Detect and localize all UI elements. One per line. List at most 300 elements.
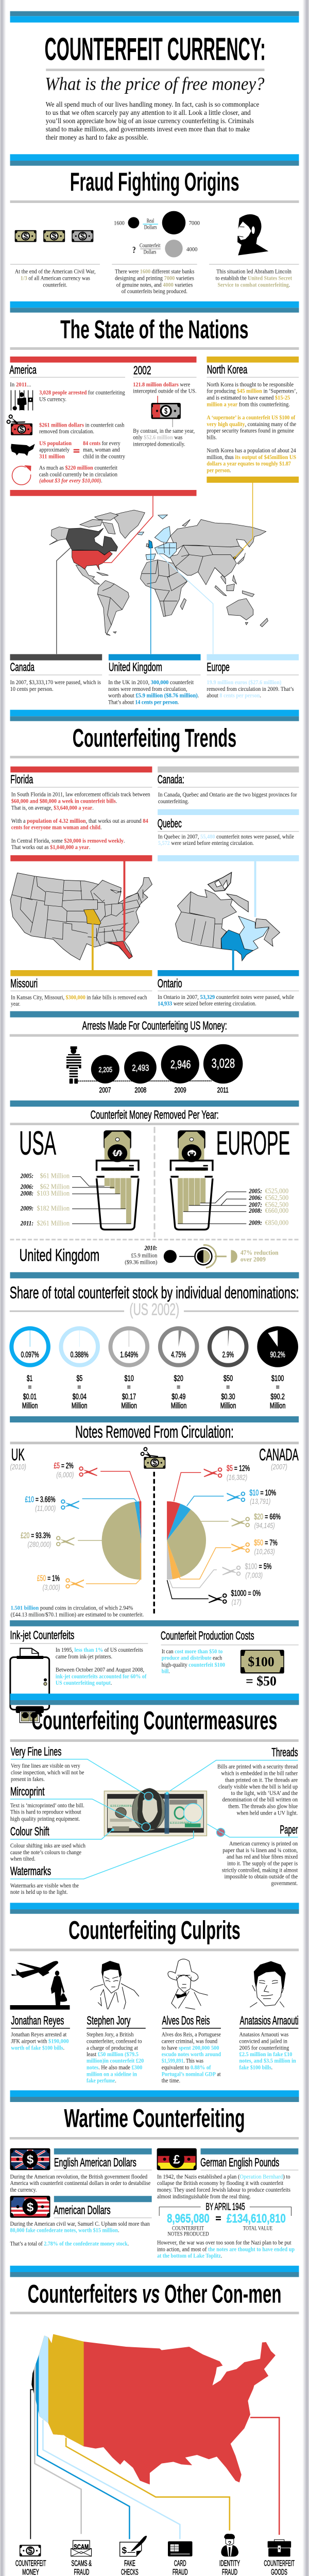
panel: Jonathan Reyes: worth of fake $100 bills . xyxy=(11,2044,64,2051)
callout: Very Fine Lines: Very Fine Lines xyxy=(11,1744,62,1758)
panel: English American Dollars xyxy=(10,2148,152,2193)
chart: real and counterfeit dollars circles: Counterfeit xyxy=(140,242,161,249)
icon: scissors cutting bill xyxy=(7,414,32,435)
stat: identity fraud: ? xyxy=(228,2540,231,2548)
dashed centre line xyxy=(153,1472,155,1616)
icon: portrait Alves Dos Reis xyxy=(168,1959,208,2009)
panel: Canada xyxy=(10,654,102,692)
panel: Ontario: In Ontario in 2007, 53,329 counterfeit notes were passed, while xyxy=(158,993,294,1001)
red bar above world map xyxy=(10,490,197,496)
series labels Europe: 2008: xyxy=(248,1207,262,1215)
series labels UK: (280,000) xyxy=(28,1541,52,1549)
section bar: origins xyxy=(10,154,299,166)
equals sign xyxy=(74,449,79,453)
chart: $10 share: 1.649% xyxy=(120,1350,138,1359)
panel: Anatasios Arnaouti xyxy=(239,1961,299,2071)
chart: $20 share xyxy=(160,1328,197,1410)
series labels Canada: $5 = 12% xyxy=(227,1463,250,1473)
icon: US flag bill: $ xyxy=(27,2200,33,2214)
panel: German English Pounds xyxy=(157,2148,298,2259)
callout: Very Fine Lines xyxy=(11,1744,84,1783)
series labels USA: $62 Million xyxy=(40,1183,70,1191)
text: state banks: There were 1600 different state banks xyxy=(115,268,195,275)
chart: $20 share: = xyxy=(177,1383,180,1392)
panel: Alves Dos Reis: the time. xyxy=(162,2077,180,2084)
series labels USA: 2008: xyxy=(20,1190,33,1198)
panel: Ink-jet Counterfeits: Between October 2007 and August 2008, xyxy=(56,1666,144,1673)
teal bar: arrests xyxy=(10,1011,299,1018)
chart: $50 share: 2.9% xyxy=(222,1350,234,1359)
series labels UK: (6,000) xyxy=(56,1471,74,1479)
chart: $10 share xyxy=(110,1328,147,1410)
chart: $5 share: $0.04 xyxy=(73,1392,87,1401)
series labels UK: £10 = 3.66% xyxy=(25,1495,56,1504)
chart: arrests ball and chain: 2,493 xyxy=(132,1063,149,1073)
chart: half-circle reduction xyxy=(164,1245,237,1268)
panel: Stephen Jory xyxy=(87,1961,146,2084)
panel: Europe: removed from circulation in 2009. That’s xyxy=(207,685,294,692)
label: EUROPE: EUROPE xyxy=(216,1125,290,1162)
pie: UK xyxy=(102,1501,141,1580)
callout: Threads: Bills are printed with a security thread xyxy=(217,1763,298,1770)
panel: Alves Dos Reis: to have spent 200,000 500 xyxy=(162,2044,219,2051)
header bar xyxy=(10,11,299,23)
heading rule xyxy=(10,200,299,203)
panel: Quebec: Quebec xyxy=(158,817,182,830)
panel: English American Dollars: America with counterfeit continental dollars in order to destabilise xyxy=(10,2179,150,2187)
panel: Canada provinces: counterfeiting. xyxy=(158,798,189,805)
heading: money removed per year: Counterfeit Money Removed Per Year: xyxy=(91,1108,219,1122)
intro text: their money as hard to fake as possible. xyxy=(46,134,148,142)
panel: Canada notes: (2007) xyxy=(271,1463,287,1471)
text: state banks xyxy=(115,268,195,295)
series labels Europe: 2007: xyxy=(248,1201,262,1209)
intro text xyxy=(46,101,260,142)
panel: Stephen Jory: least £50 million ($79.5 xyxy=(87,2050,139,2058)
panel: German English Pounds: collapse the British economy by flooding it with counterfeit xyxy=(157,2179,284,2187)
panel: Florida xyxy=(10,767,152,851)
heading: denominations: Share of total counterfeit stock by individual denominations: xyxy=(10,1284,299,1302)
callout: Threads: to the light, with ‘USA’ and the xyxy=(231,1789,298,1797)
panel: North Korea: A ‘supernote’ is a counterfeit US $100 of xyxy=(207,414,295,421)
heading: Wartime Counterfeiting: Wartime Counterfeiting xyxy=(64,2105,245,2133)
chart: arrests ball and chain: 2009 xyxy=(175,1087,186,1095)
heading: Counterfeiting Countermeasures: Counterfeiting Countermeasures xyxy=(31,1707,277,1736)
heading rule xyxy=(10,1034,299,1037)
stat: fake checks: $ xyxy=(122,2545,127,2555)
series labels Europe: €562,500 xyxy=(265,1194,288,1202)
panel: UK notes: (£44.13 million/$70.1 million) are estimated to be counterfeit. xyxy=(11,1611,144,1618)
icon: USA silhouette xyxy=(11,444,35,456)
series labels Canada xyxy=(204,1463,281,1606)
panel: Florida: In Central Florida, some $20,000 is removed weekly . xyxy=(11,837,125,844)
panel: Jonathan Reyes xyxy=(10,1961,70,2051)
panel: United Kingdom: That’s about 14 cents per person . xyxy=(108,699,179,705)
callout: Threads: clearly visible when the bill is held up xyxy=(218,1783,298,1790)
callout: Paper: paper that is ¼ linen and ¾ cotton, xyxy=(222,1846,298,1854)
chart: $10 share: Million xyxy=(121,1401,137,1410)
panel: North Korea: per person . xyxy=(207,467,231,473)
heading rule xyxy=(10,2137,299,2140)
map: USA share by fraud type xyxy=(30,2334,280,2539)
series labels USA: $261 Million xyxy=(37,1220,70,1228)
chart: arrests ball and chain: 2,205 xyxy=(98,1066,112,1074)
subheading: US 2002 xyxy=(10,1301,299,1319)
panel: Alves Dos Reis: $1,599,891 . This was xyxy=(162,2057,204,2064)
text: state banks: of genuine notes, and 4000 varieties xyxy=(116,281,193,288)
panel: UK notes: (2010) xyxy=(10,1463,26,1471)
callout: Paper xyxy=(222,1823,298,1887)
series labels Canada: (10,263) xyxy=(254,1548,275,1556)
panel: America: child in the country xyxy=(83,453,126,460)
panel: Alves Dos Reis: equivalent to 0.88% of xyxy=(162,2064,211,2071)
callout: Very Fine Lines: Very fine lines are visible on very xyxy=(11,1762,80,1769)
intro text: We all spend much of our lives handling money. In fact, cash is so commonplace xyxy=(46,101,260,109)
icon: German flag bill xyxy=(157,2148,197,2170)
chart: $1 share: = xyxy=(28,1383,31,1392)
icon: three bills: $ xyxy=(23,232,28,241)
panel: North Korea: very high quality , containing many of the xyxy=(207,420,296,428)
series labels USA: $182 Million xyxy=(37,1205,70,1213)
panel: Jonathan Reyes: JFK airport with $190,000 xyxy=(11,2038,69,2044)
callout: Threads: them. The threads also glow blue xyxy=(228,1803,298,1809)
callout: Mircoprint: Mircoprint xyxy=(10,1785,45,1798)
stat: counterfeit money xyxy=(10,2545,54,2576)
panel: Alves Dos Reis: Alves Dos Reis xyxy=(162,2013,210,2027)
callout lines xyxy=(10,1759,298,1879)
callout: Colour Shift xyxy=(10,1824,86,1862)
panel: North Korea: for producing $45 million in ‘Supernotes’, xyxy=(207,387,297,394)
callout: Watermarks: Watermarks xyxy=(10,1864,51,1878)
icon: scissors and bill centre xyxy=(140,1447,165,1469)
panel: North Korea: and is estimated to have earned $15-25 xyxy=(207,394,290,401)
panel: Alves Dos Reis: escudo notes worth around xyxy=(162,2050,221,2058)
icon: portrait Stephen Jory xyxy=(90,1961,139,2009)
panel: United Kingdom: worth about £5.9 million ($8.76 million) . xyxy=(108,692,199,699)
teal bar: ink-jet xyxy=(10,1620,299,1626)
text: civil war: 1/3 of all American currency was xyxy=(21,275,91,281)
icon: payment card xyxy=(168,2541,192,2556)
panel: Quebec: In Quebec in 2007, 55,480 counterfeit notes were passed, while xyxy=(158,833,294,840)
panel: America: removed from circulation. xyxy=(39,428,94,435)
panel: Counterfeit Production Costs: produce and distribute each xyxy=(162,1654,222,1661)
panel: America: $261 million dollars in counterfeit cash xyxy=(39,421,125,428)
section bar: con-men xyxy=(10,2266,299,2277)
series labels Europe: €562,500 xyxy=(265,1201,288,1209)
callout: Colour Shift: Colour Shift xyxy=(10,1824,49,1838)
series labels Canada: (94,145) xyxy=(254,1522,275,1530)
panel: America: America xyxy=(9,363,37,377)
rules over columns xyxy=(10,264,299,265)
series labels Europe xyxy=(178,1188,288,1227)
illustration: $100 banknote: E31119560FE xyxy=(170,1822,193,1824)
panel: UK notes: 1.501 billion pound coins in circulation, of which 2.94% xyxy=(11,1604,133,1611)
stat: scams and fraud xyxy=(60,2540,101,2576)
panel: Anatasios Arnaouti: fake $100 bills . xyxy=(239,2064,272,2071)
series labels Europe: €660,000 xyxy=(265,1207,288,1215)
series labels USA: 2005: xyxy=(20,1173,33,1180)
callout: Very Fine Lines: close inspection, which will not be xyxy=(11,1769,84,1776)
stat: card fraud xyxy=(160,2541,198,2576)
chart: $1 share xyxy=(11,1328,48,1410)
callout: Watermarks: note is held up to the light. xyxy=(10,1888,68,1895)
illustration: $100 banknote xyxy=(104,1788,225,1837)
series labels USA: 2006: xyxy=(20,1183,33,1191)
chart: $5 share: Million xyxy=(72,1401,88,1410)
series labels Canada: (7,003) xyxy=(245,1572,263,1580)
icon: prisoner xyxy=(66,1046,81,1083)
chart: USA shredder xyxy=(20,1130,142,1230)
chart: $5 share xyxy=(61,1328,98,1410)
panel: Ontario xyxy=(158,970,299,1007)
panel: Anatasios Arnaouti: Anatasios Arnaouti xyxy=(240,2013,299,2027)
panel: Quebec xyxy=(158,809,299,846)
panel: America: (about $3 for every $10,000) . xyxy=(39,477,102,484)
intro text: stand to make millions, and governments invest even more than that to make xyxy=(46,126,250,133)
panel: American Dollars: 80,000 fake confederate notes, worth $15 million . xyxy=(10,2227,119,2233)
panel: Ink-jet Counterfeits: US counterfeiting output . xyxy=(56,1679,112,1686)
icon: scissors and bill centre: $ xyxy=(152,1459,157,1468)
panel: Stephen Jory: fake perfume . xyxy=(87,2077,116,2084)
text: secret service: This situation led Abraham Lincoln xyxy=(216,268,292,275)
chart: real and counterfeit dollars circles: ? xyxy=(132,245,136,255)
heading: arrests: Arrests Made For Counterfeiting US Money: xyxy=(82,1019,227,1032)
panel: Florida: That is, on average, $3,640,000 a year . xyxy=(11,804,94,811)
icon: $100 bill xyxy=(241,1650,284,1673)
panel: Stephen Jory: Stephen Jory xyxy=(87,2013,131,2027)
panel: Canada provinces: In Canada, Quebec and Ontario are the two biggest provinces for xyxy=(158,791,297,798)
panel: Counterfeit Production Costs: Counterfeit Production Costs xyxy=(161,1629,254,1642)
text: civil war: counterfeit. xyxy=(43,281,67,288)
panel: Florida: cents for everyone man woman and child . xyxy=(11,824,101,831)
panel: Canada notes xyxy=(167,1446,299,1606)
panel: German English Pounds: into action, and most of the notes are thought to have ended up xyxy=(157,2246,295,2252)
panel: North Korea: North Korea is thought to be responsible xyxy=(207,381,294,388)
chart: $20 share: $0.49 xyxy=(171,1392,186,1401)
series labels Canada: $20 = 66% xyxy=(254,1512,281,1521)
chart: $50 share xyxy=(210,1328,247,1410)
series labels Europe: €850,000 xyxy=(265,1219,288,1227)
callout: Mircoprint xyxy=(10,1785,84,1822)
chart: $5 share: = xyxy=(77,1383,81,1392)
callout: Watermarks xyxy=(10,1864,79,1895)
panel: North Korea: North Korea xyxy=(207,363,247,376)
series labels Canada: (17) xyxy=(232,1598,242,1606)
panel: Alves Dos Reis: Alves dos Reis, a Portuguese xyxy=(162,2031,221,2038)
chart: $20 share: 4.75% xyxy=(171,1350,186,1359)
section bar: nations xyxy=(10,301,299,313)
map: Canada provinces xyxy=(176,861,280,970)
panel: Florida: $60,000 and $80,000 a week in counterfeit bills . xyxy=(11,798,117,804)
stat: counterfeit money: $ xyxy=(28,2547,32,2555)
icon: briefcase xyxy=(268,2539,291,2556)
panel: Ontario: 14,933 were seized before entering circulation. xyxy=(158,1000,256,1007)
series labels Europe: €525,000 xyxy=(265,1188,288,1195)
panel: Canada provinces xyxy=(158,767,299,805)
panel: America: US population xyxy=(39,439,72,447)
panel: Anatasios Arnaouti: Anatasios Arnaouti was xyxy=(239,2031,289,2038)
callout: Mircoprint: high quality printing equipment. xyxy=(10,1815,80,1822)
chart: real and counterfeit dollars circles xyxy=(114,211,200,257)
chart: arrests ball and chain xyxy=(66,1044,243,1095)
panel: Alves Dos Reis: Portugal’s nominal GDP at xyxy=(162,2071,221,2077)
heading rule xyxy=(10,1948,299,1951)
chart: real and counterfeit dollars circles: Dollars xyxy=(144,248,157,255)
panel: 2002: 121.8 million dollars were xyxy=(133,381,190,388)
panel: 2002 xyxy=(133,364,197,447)
chart: real and counterfeit dollars circles: Dollars xyxy=(144,224,157,230)
panel: America: As much as $220 million counterfeit xyxy=(39,464,118,471)
panel: America: 311 million xyxy=(39,453,65,460)
panel: United Kingdom: United Kingdom xyxy=(109,660,162,674)
panel: UK notes xyxy=(10,1446,144,1618)
panel: Anatasios Arnaouti: notes, and $3.5 million in xyxy=(239,2057,296,2064)
icon: Union Jack bill xyxy=(10,2148,50,2170)
panel: Ink-jet Counterfeits xyxy=(10,1629,148,1723)
panel: America xyxy=(7,357,197,485)
chart: arrests ball and chain: 2007 xyxy=(99,1087,111,1095)
panel: English American Dollars: During the American revolution, the British government flooded xyxy=(10,2173,148,2180)
teal bar: notes removed xyxy=(10,1416,299,1422)
panel: English American Dollars: English American Dollars xyxy=(54,2156,136,2169)
world map xyxy=(49,483,268,654)
panel: Alves Dos Reis xyxy=(162,1959,221,2084)
series labels Canada: (13,791) xyxy=(250,1498,271,1506)
heading: Counterfeiters vs Other Con-men: Counterfeiters vs Other Con-men xyxy=(28,2280,281,2309)
icon: three bills: $ xyxy=(52,232,57,241)
chart: $50 share: $50 xyxy=(224,1374,233,1383)
chart: $1 share: $0.01 xyxy=(23,1392,37,1401)
panel: German English Pounds: money. They used forced Jewish labour to produce counterfeits xyxy=(157,2186,291,2193)
heading: The State of the Nations: The State of the Nations xyxy=(60,316,249,345)
stat: by April 1945: COUNTERFEIT xyxy=(172,2225,204,2231)
series labels USA: 2011: xyxy=(20,1220,33,1228)
panel: Canada: 10 cents per person. xyxy=(10,685,54,692)
stat: by April 1945: 8,965,080 xyxy=(167,2212,210,2225)
panel: Missouri: Missouri xyxy=(10,977,38,990)
heading: Counterfeiting Culprits: Counterfeiting Culprits xyxy=(68,1917,241,1945)
series labels USA: $103 Million xyxy=(37,1190,70,1198)
series labels UK: £50 = 1% xyxy=(37,1573,60,1583)
panel: American Dollars: American Dollars xyxy=(54,2203,111,2217)
illustration: $100 banknote: E31119560FE xyxy=(110,1805,133,1807)
panel: North Korea: million, thus its output of $45million US xyxy=(207,453,296,461)
callout: Colour Shift: Colour shifting inks are used which xyxy=(10,1842,86,1849)
stat: identity fraud: IDENTITY xyxy=(219,2558,240,2568)
panel: United Kingdom removal: over 2009 xyxy=(241,1257,266,1264)
icon: split bill xyxy=(151,396,181,427)
callout: Threads: denomination of the bill written on xyxy=(222,1796,298,1803)
chart: arrests ball and chain: 2011 xyxy=(217,1087,229,1095)
panel: Quebec: 5,572 were seized before entering circulation. xyxy=(158,839,254,846)
icon: scam envelope xyxy=(71,2540,92,2556)
icon: check and pen xyxy=(120,2536,147,2556)
callout: Mircoprint: Text is ‘microprinted’ onto the bill. xyxy=(10,1802,84,1809)
chart: $100 share: Million xyxy=(270,1401,285,1410)
series labels UK xyxy=(21,1461,97,1592)
heading rule xyxy=(10,1123,299,1125)
intro text: you’ll soon appreciate how big of an issue currency counterfeiting is. Criminals xyxy=(46,117,254,125)
stat: by April 1945: NOTES PRODUCED xyxy=(167,2230,209,2237)
panel: America: US currency. xyxy=(39,396,66,402)
callout: Colour Shift: when tilted. xyxy=(10,1855,36,1862)
panel: United Kingdom removal: £5.9 million xyxy=(131,1252,158,1259)
stat: counterfeit goods: COUNTERFEIT xyxy=(264,2558,295,2568)
panel: America: cash could currently be in circulation xyxy=(39,471,118,478)
map: USA states xyxy=(10,861,152,970)
panel: United Kingdom: In the UK in 2010, 300,000 counterfeit xyxy=(108,679,194,686)
series labels USA: $61 Million xyxy=(40,1173,70,1180)
panel: English American Dollars: the currency. xyxy=(10,2186,37,2193)
chart: $50 share: Million xyxy=(220,1401,236,1410)
callout: Watermarks: Watermarks are visible when the xyxy=(10,1882,79,1889)
series labels UK: £5 = 2% xyxy=(54,1461,74,1470)
callout: Paper: Paper xyxy=(280,1823,298,1836)
panel: United Kingdom removal: ($9.36 million) xyxy=(125,1259,157,1265)
chart: Europe shredder: € xyxy=(184,1149,198,1157)
icon: German flag bill: £ xyxy=(173,2153,180,2167)
callout: Paper: into it. The supply of the paper is xyxy=(227,1860,298,1867)
panel: Ink-jet Counterfeits: came from ink-jet printers. xyxy=(56,1653,112,1660)
series labels UK: (11,000) xyxy=(35,1505,56,1513)
chart: arrests ball and chain: 2,946 xyxy=(170,1058,191,1071)
callout: Paper: impossible to obtain outside of the xyxy=(224,1873,298,1880)
panel: America: In 2011 ... xyxy=(10,381,31,388)
icon: US flag bill xyxy=(10,2196,50,2218)
series labels Europe: 2006: xyxy=(248,1194,262,1202)
series labels USA xyxy=(20,1173,131,1228)
teal bar: denominations xyxy=(10,1272,299,1278)
panel: Missouri: In Kansas City, Missouri, $300,000 in fake bills is removed each xyxy=(11,994,147,1001)
panel: United Kingdom: notes were removed from circulation, xyxy=(108,685,187,692)
stat: by April 1945: TOTAL VALUE xyxy=(243,2225,272,2231)
icon: portrait Anatasios Arnaouti xyxy=(250,1961,286,2007)
stat: scams and fraud: SCAMS & xyxy=(72,2558,92,2568)
stat: card fraud: CARD xyxy=(174,2558,186,2568)
chart: $20 share: $20 xyxy=(174,1374,183,1383)
icon: Union Jack bill: $ xyxy=(27,2153,33,2167)
icon: split bill: $ xyxy=(164,406,167,416)
title rule xyxy=(46,69,265,71)
panel: Counterfeit Production Costs: = $50 xyxy=(246,1674,277,1689)
chart: arrests ball and chain: 2008 xyxy=(134,1087,146,1095)
callout: Paper: government. xyxy=(271,1879,298,1887)
panel: Florida: That works out as $1,040,000 a year . xyxy=(11,843,90,851)
text: civil war: At the end of the American Civil War, xyxy=(15,268,96,275)
panel: North Korea: bills. xyxy=(207,434,217,440)
series labels Canada: $1000 = 0% xyxy=(231,1588,261,1598)
panel: American Dollars xyxy=(10,2196,152,2247)
text: secret service: Service to combat counterfeiting . xyxy=(217,281,290,288)
panel: 2002: 2002 xyxy=(133,364,151,377)
stat: identity fraud xyxy=(207,2534,250,2576)
chart: real and counterfeit dollars circles: Real xyxy=(147,217,154,224)
panel: United Kingdom removal: 47% reduction xyxy=(241,1250,279,1257)
callout: Very Fine Lines: present in fakes. xyxy=(11,1775,45,1783)
panel: Anatasios Arnaouti: convicted and jailed in xyxy=(239,2038,288,2044)
icon: anonymous man xyxy=(221,2534,238,2556)
panel: German English Pounds: German English Pounds xyxy=(200,2156,279,2169)
chart: $1 share: 0.097% xyxy=(21,1350,39,1359)
icon: $100 bill: $100 xyxy=(248,1655,274,1670)
callout: Threads xyxy=(217,1745,298,1816)
chart: real and counterfeit dollars circles: 4000 xyxy=(186,246,198,252)
chart: $5 share: 0.388% xyxy=(71,1350,89,1359)
icon: printer xyxy=(10,1648,49,1723)
panel: United Kingdom removal xyxy=(20,1245,279,1268)
callout: Threads: Threads xyxy=(271,1745,298,1759)
heading: notes removed: Notes Removed From Circulation: xyxy=(75,1423,234,1442)
